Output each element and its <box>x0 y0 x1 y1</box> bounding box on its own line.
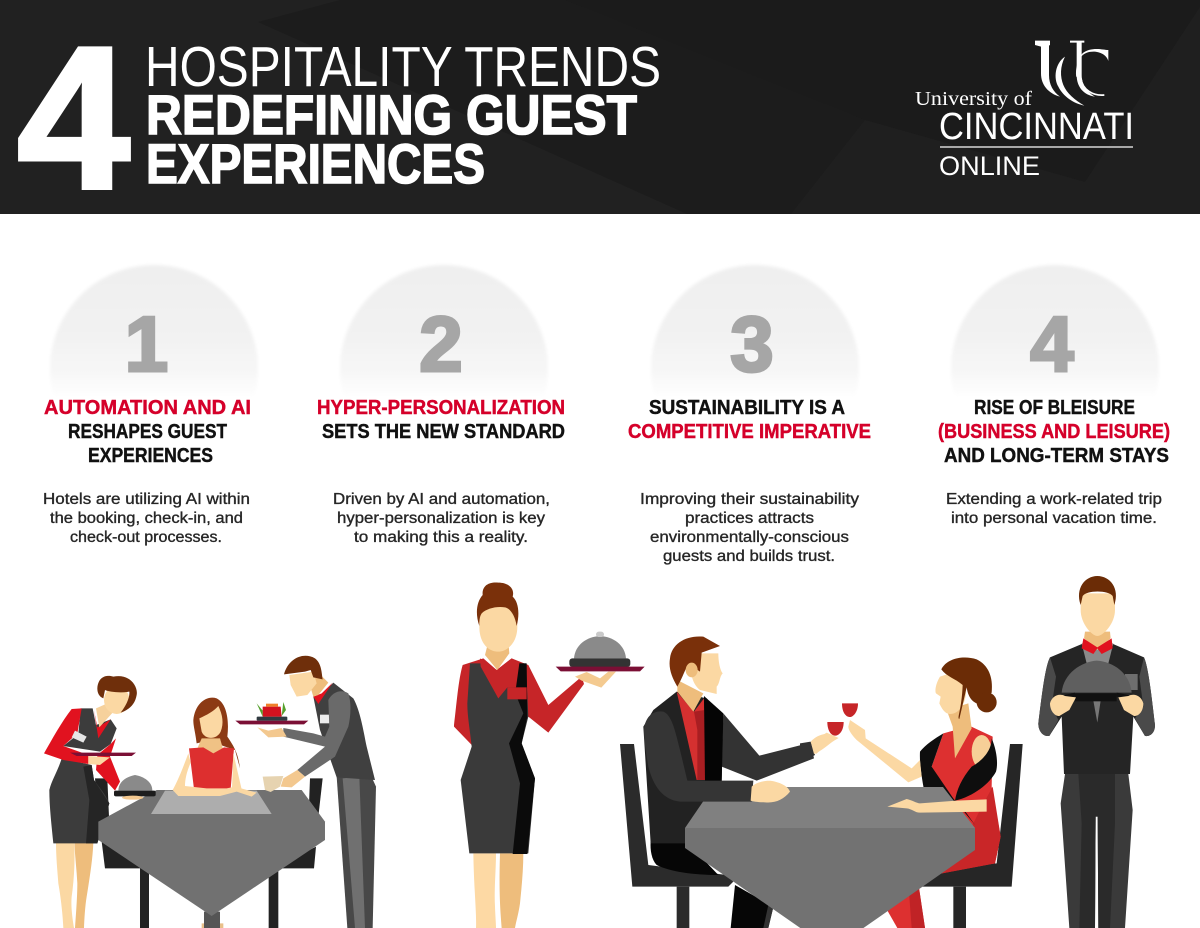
seated man chair <box>620 744 733 928</box>
trend 3 column <box>628 265 871 565</box>
trend 2 description: hyper-personalization is key <box>337 510 545 527</box>
seated woman <box>173 698 257 797</box>
title: REDEFINING GUEST <box>146 83 637 146</box>
trend 1 heading <box>44 397 251 467</box>
trend 2 description: Driven by AI and automation, <box>333 491 550 508</box>
seated woman's arm on table <box>887 799 987 813</box>
trend 3 heading <box>628 397 871 443</box>
trend 2 column <box>317 265 565 546</box>
logo monogram <box>1035 41 1108 106</box>
chair and table legs <box>95 778 323 928</box>
seated woman <box>848 657 1001 928</box>
trend 3 heading: COMPETITIVE IMPERATIVE <box>628 421 871 443</box>
trend 4 column <box>938 265 1170 527</box>
trend 4 heading: AND LONG-TERM STAYS <box>944 445 1169 467</box>
number circle 1 <box>50 265 258 473</box>
University of Cincinnati Online logo: University of <box>915 88 1032 110</box>
title: HOSPITALITY TRENDS <box>145 35 661 99</box>
University of Cincinnati Online logo <box>915 41 1134 181</box>
illustration: table service scene <box>44 656 376 928</box>
trend 1 column <box>43 265 258 546</box>
waitress head <box>477 582 518 670</box>
wine glasses and man's hand <box>800 703 858 763</box>
waitress legs <box>473 853 523 928</box>
number circle 1: 1 <box>125 300 168 388</box>
number circle 3: 3 <box>730 300 774 388</box>
trend 4 heading <box>938 397 1170 467</box>
title: EXPERIENCES <box>146 132 485 195</box>
trend 3 description <box>640 491 859 565</box>
trend 1 heading: AUTOMATION AND AI <box>44 397 251 419</box>
title <box>145 35 661 195</box>
number circle 3 <box>651 265 859 473</box>
illustration: waitress with cloche <box>454 582 839 928</box>
trend 1 description: Hotels are utilizing AI within <box>43 491 250 508</box>
waiter right <box>235 656 376 928</box>
trend 3 heading: SUSTAINABILITY IS A <box>649 397 845 419</box>
trend 3 description: guests and builds trust. <box>663 548 835 565</box>
trend 2 heading <box>317 397 565 443</box>
trend 3 description: practices attracts <box>685 510 814 527</box>
number circle 2: 2 <box>419 300 463 388</box>
trend 1 description: check-out processes. <box>70 529 222 546</box>
cloche on tray <box>556 632 645 688</box>
University of Cincinnati Online logo: ONLINE <box>939 151 1040 181</box>
trend 3 description: environmentally-conscious <box>650 529 849 546</box>
waitress left <box>44 676 137 928</box>
table with cloth and placemat <box>98 790 325 916</box>
header banner <box>0 0 1200 232</box>
trend 1 heading: RESHAPES GUEST <box>68 421 227 443</box>
trend 4 heading: (BUSINESS AND LEISURE) <box>938 421 1170 443</box>
trend 4 description: Extending a work-related trip <box>946 491 1162 508</box>
trend 2 heading: SETS THE NEW STANDARD <box>322 421 565 443</box>
number circle 4 <box>951 265 1159 473</box>
seated woman chair <box>900 744 1023 928</box>
trend 3 description: Improving their sustainability <box>640 491 859 508</box>
standing waiter <box>1038 576 1155 928</box>
trend 2 description <box>333 491 550 546</box>
number circle 4: 4 <box>1030 300 1074 388</box>
big numeral 4: 4 <box>17 5 130 232</box>
trend 2 description: to making this a reality. <box>354 529 528 546</box>
illustration: dining table <box>685 787 975 928</box>
trend 1 description <box>43 491 250 546</box>
covered dish <box>114 775 156 800</box>
trend 4 heading: RISE OF BLEISURE <box>974 397 1135 419</box>
illustration: seated woman and standing waiter <box>800 576 1155 928</box>
waitress dress <box>454 658 584 854</box>
trend 1 heading: EXPERIENCES <box>88 445 213 467</box>
trend 4 description: into personal vacation time. <box>951 510 1157 527</box>
seated man's arm and hand on table <box>644 711 790 803</box>
trend 2 heading: HYPER-PERSONALIZATION <box>317 397 565 419</box>
trend 1 description: the booking, check-in, and <box>50 510 243 527</box>
number circle 2 <box>340 265 548 473</box>
trend 4 description <box>946 491 1162 527</box>
University of Cincinnati Online logo: CINCINNATI <box>939 106 1134 148</box>
seated man <box>643 636 839 928</box>
